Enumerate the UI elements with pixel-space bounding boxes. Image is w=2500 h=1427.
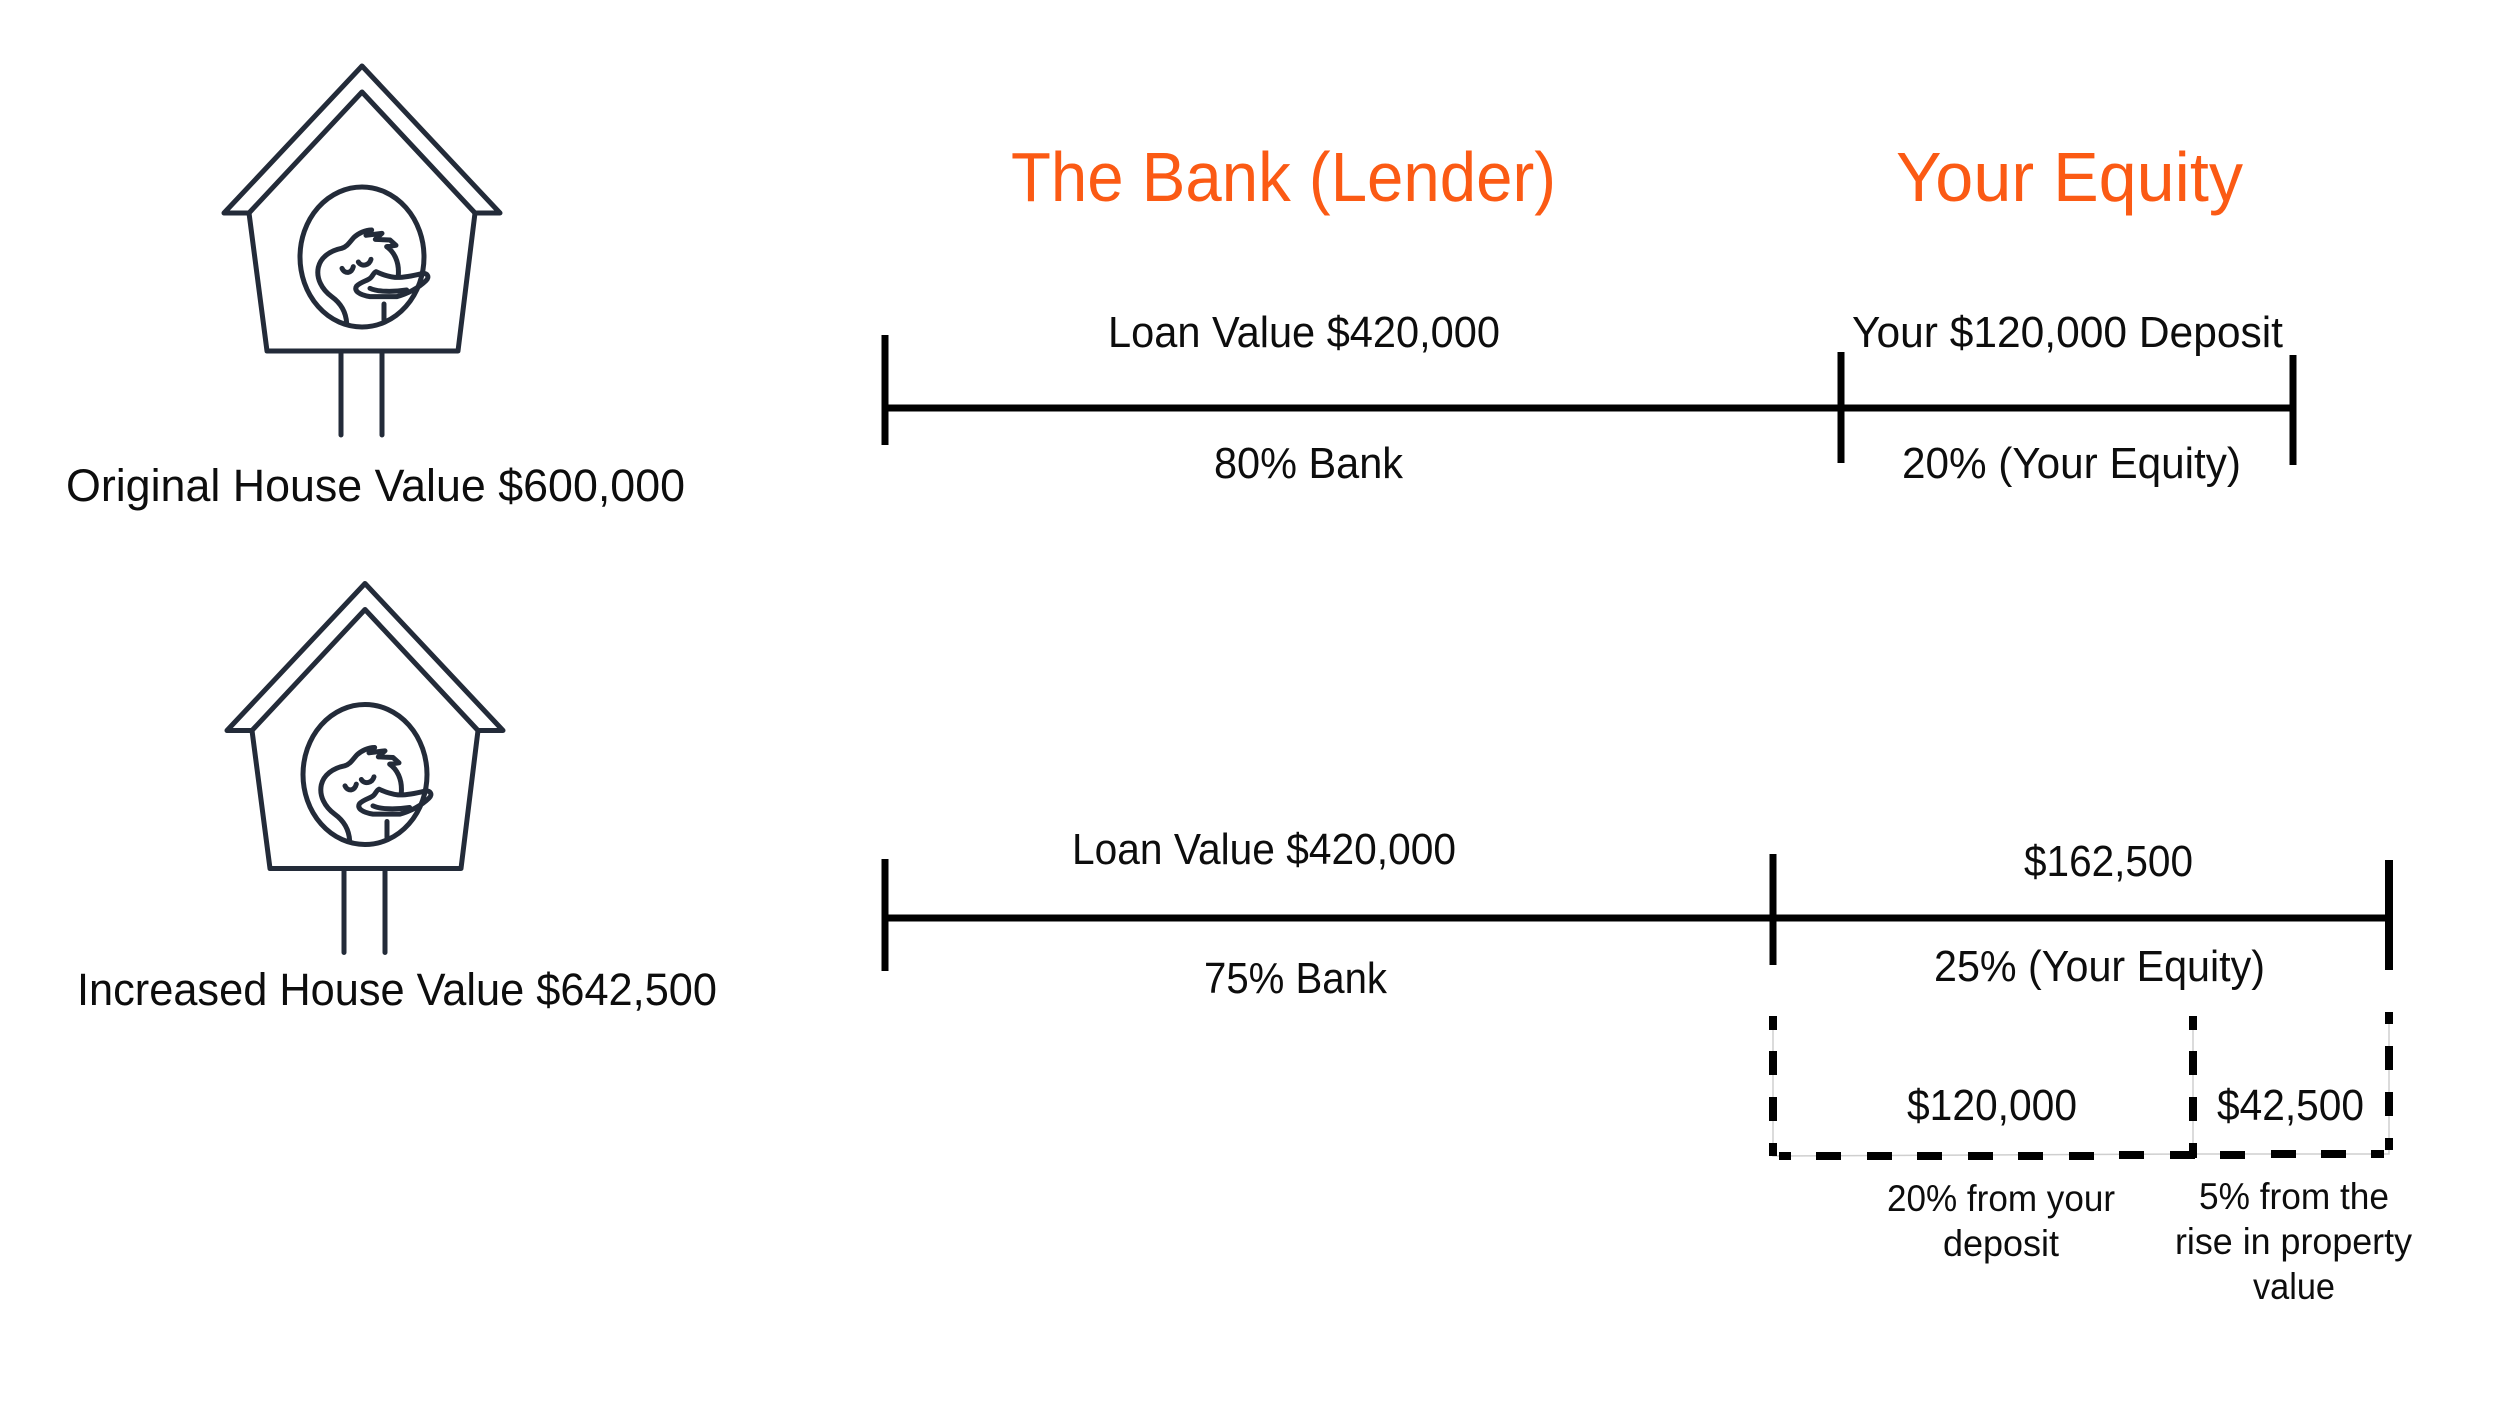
- label: increased house value: Increased House Value $642,500: [77, 964, 717, 1015]
- label: loan value, original: Loan Value $420,000: [1108, 308, 1500, 357]
- chart: original split bar: [885, 335, 2293, 465]
- label: original house value: Original House Value $600,000: [66, 460, 685, 511]
- label: total equity amount: $162,500: [2024, 837, 2193, 886]
- icon: birdhouse with duck, increased value: [227, 584, 503, 952]
- label: 25 percent equity: 25% (Your Equity): [1934, 942, 2265, 991]
- chart: dashed equity breakdown brackets: [1773, 1012, 2389, 1158]
- heading: the bank: The Bank (Lender): [1011, 138, 1556, 216]
- icon: birdhouse with duck, original value: [224, 66, 500, 435]
- label: growth portion: $42,500: [2217, 1081, 2364, 1130]
- note: 5 percent from property rise: 5% from the: [2199, 1176, 2389, 1217]
- label: 80 percent bank: 80% Bank: [1214, 439, 1404, 488]
- chart: increased split bar: [885, 854, 2389, 971]
- label: deposit: Your $120,000 Deposit: [1852, 308, 2283, 357]
- heading: your equity: Your Equity: [1896, 138, 2243, 216]
- note: 5 percent from property rise: rise in property: [2175, 1221, 2412, 1262]
- label: deposit portion: $120,000: [1907, 1081, 2077, 1130]
- note: 20 percent from deposit: 20% from your: [1887, 1178, 2115, 1219]
- note: 20 percent from deposit: [1887, 1178, 2115, 1264]
- note: 5 percent from property rise: [2175, 1176, 2412, 1307]
- label: 20 percent equity: 20% (Your Equity): [1902, 439, 2241, 488]
- note: 20 percent from deposit: deposit: [1943, 1223, 2060, 1264]
- label: loan value, increased: Loan Value $420,000: [1072, 825, 1456, 874]
- note: 5 percent from property rise: value: [2253, 1266, 2335, 1307]
- label: 75 percent bank: 75% Bank: [1204, 954, 1388, 1003]
